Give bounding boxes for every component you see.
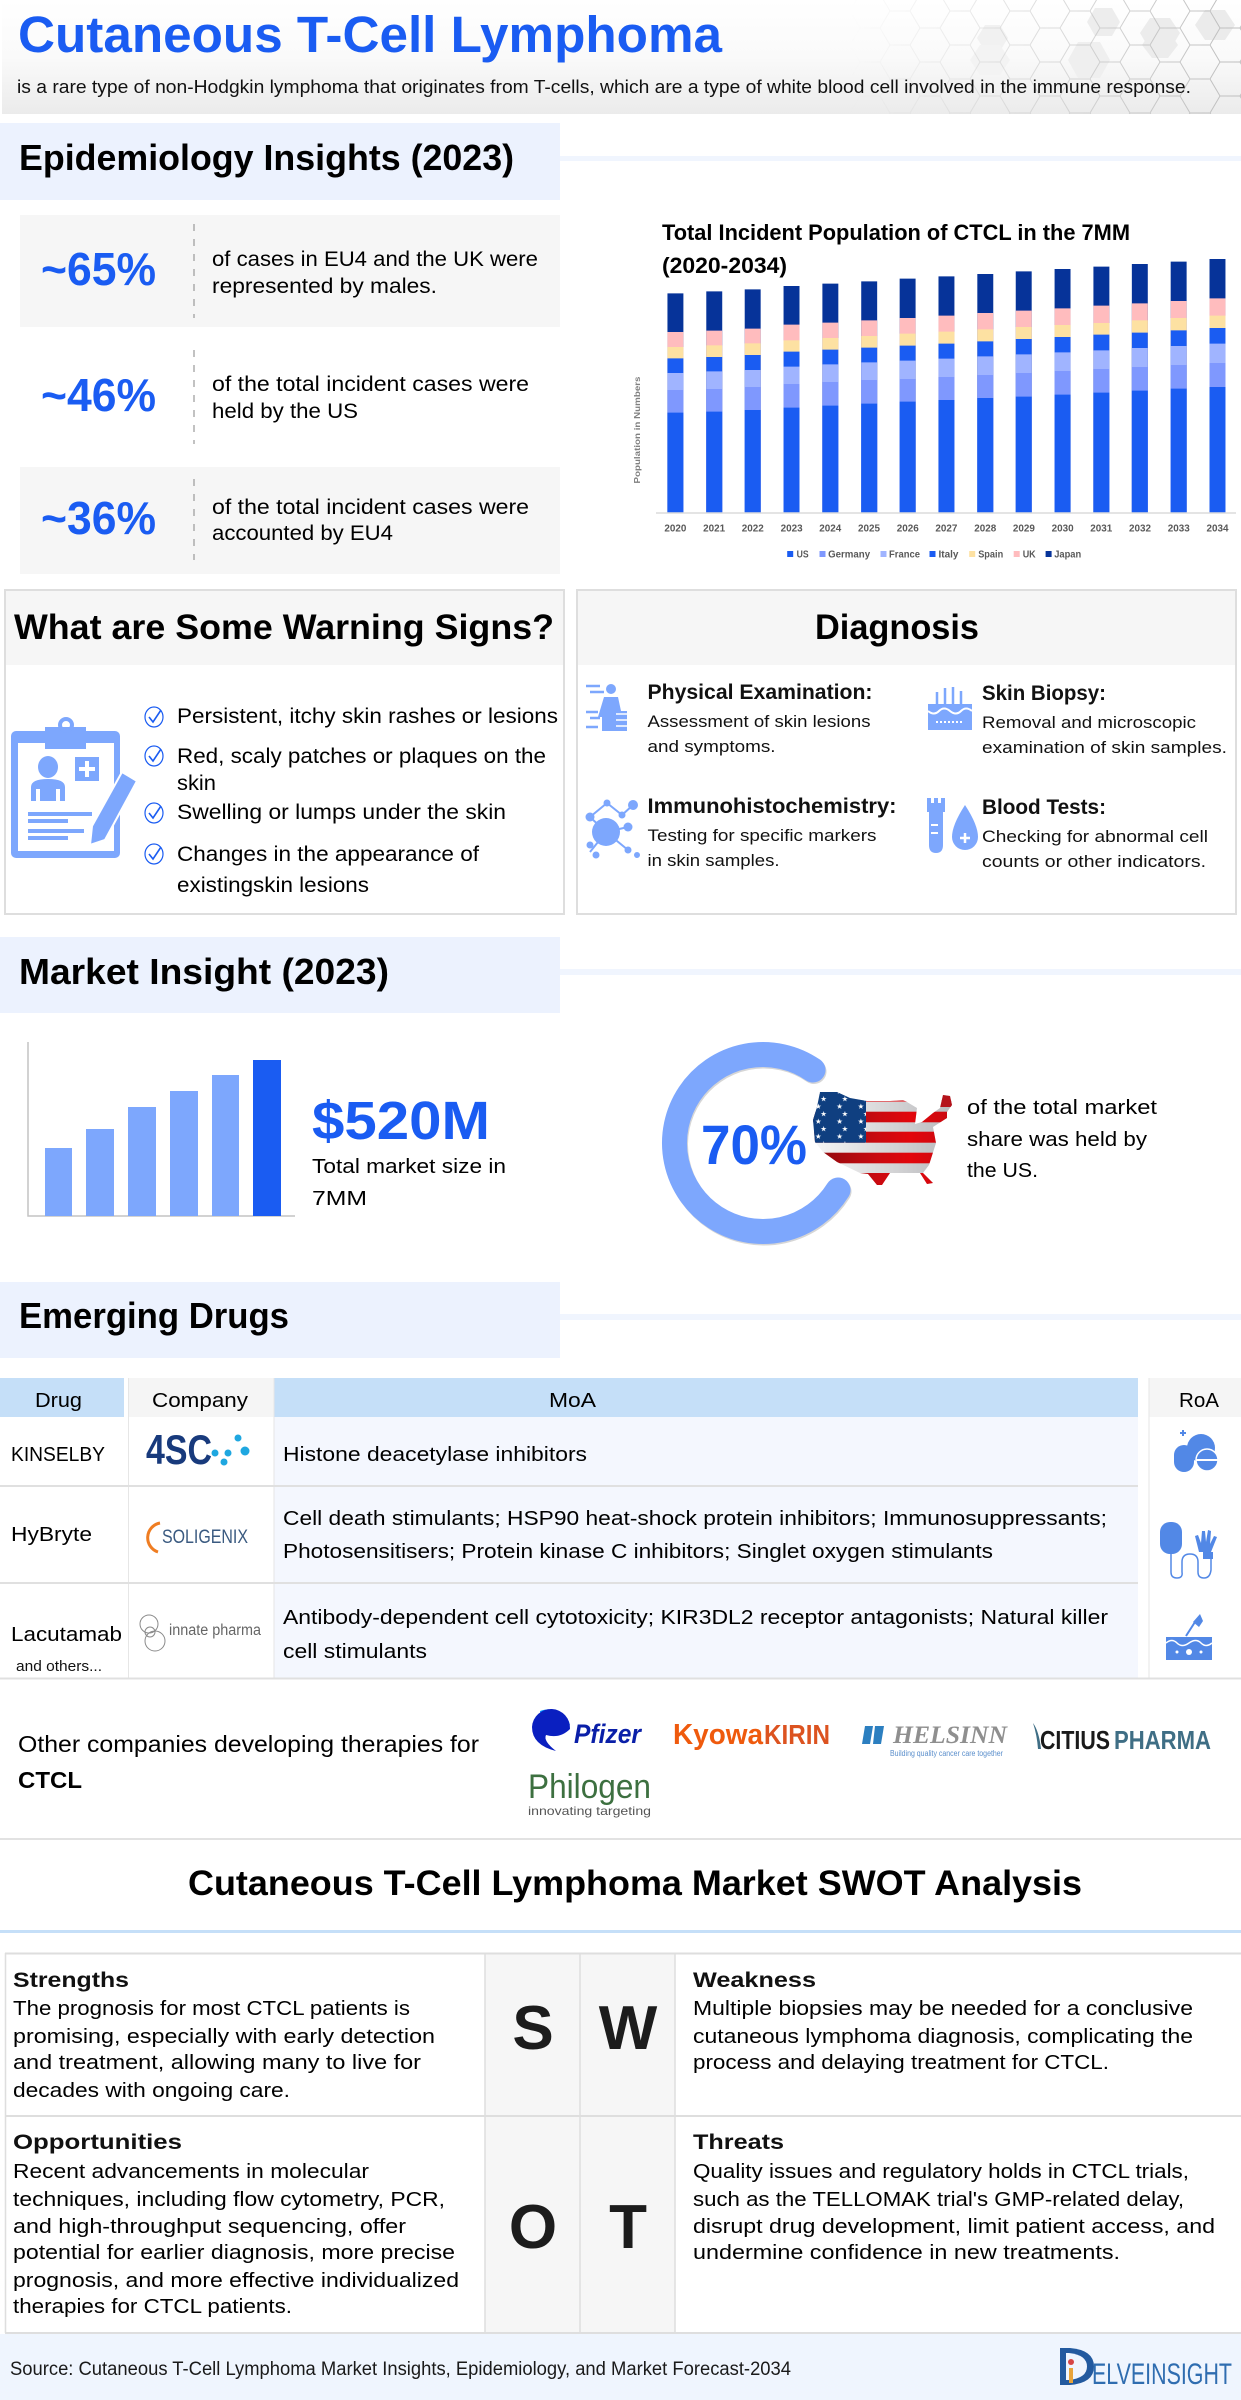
y axis label: Population in Numbers (633, 376, 642, 484)
item: immunohistochemistry: Testing for specific markers (648, 826, 876, 845)
logo: Pfizer (532, 1709, 642, 1751)
threats: such as the TELLOMAK trial's GMP-related delay, (693, 2189, 1184, 2211)
table header: Company (152, 1390, 248, 1412)
item: rashes: Persistent, itchy skin rashes or lesions (177, 705, 558, 728)
threats: Quality issues and regulatory holds in CTCL trials, (693, 2161, 1189, 2183)
legend: Japan (1054, 550, 1081, 560)
logo: Soligenix: SOLIGENIX (162, 1527, 248, 1548)
item: skin biopsy: Skin Biopsy: (982, 682, 1106, 705)
icon: test tube and drop (927, 798, 978, 853)
item: physical examination: and symptoms. (648, 737, 776, 756)
threats: Threats (693, 2131, 784, 2154)
stat: 46 percent: of the total incident cases were (212, 373, 529, 396)
x axis and years: 2026 (897, 522, 919, 534)
x axis and years: 2025 (858, 522, 880, 534)
row: Lacutamab: Antibody-dependent cell cytotoxicity; KIR3DL2 receptor antagonists; Natural killer (283, 1607, 1108, 1629)
checklist (145, 705, 558, 897)
legend: Spain (978, 550, 1003, 560)
market share text (967, 1097, 1158, 1182)
logo: 4SC: 4SC (146, 1426, 212, 1473)
item: skin biopsy (928, 682, 1227, 757)
x axis and years: 2024 (819, 522, 841, 534)
subtitle: is a rare type of non-Hodgkin lymphoma that originates from T-cells, which are a type of white blood cell involved in the immune response. (17, 76, 1191, 97)
strengths: decades with ongoing care. (13, 2080, 290, 2102)
x axis and years: 2029 (1013, 522, 1035, 534)
item: scaly patches: skin (177, 772, 216, 795)
other companies: CTCL (18, 1767, 82, 1793)
section heading: Emerging Drugs: Emerging Drugs (19, 1295, 289, 1336)
legend: Italy (938, 550, 959, 560)
icon: skin layers (928, 687, 972, 730)
icon: pills (1174, 1430, 1218, 1472)
weakness: process and delaying treatment for CTCL. (693, 2052, 1109, 2074)
item: changes: Changes in the appearance of (177, 843, 479, 866)
row: KINSELBY (11, 1426, 1218, 1473)
letter O: O (509, 2193, 557, 2262)
x axis and years: 2030 (1052, 522, 1074, 534)
logo: Philogen: innovating targeting (528, 1804, 651, 1818)
x axis and years: 2031 (1090, 522, 1112, 534)
opportunities: techniques, including flow cytometry, PCR, (13, 2189, 445, 2211)
letter W: W (599, 1994, 658, 2063)
x axis and years: 2027 (935, 522, 958, 534)
stat: 65 percent: represented by males. (212, 275, 437, 298)
chart title: Total Incident Population of CTCL in the 7MM (662, 220, 1130, 245)
threats (693, 2131, 1215, 2264)
opportunities (13, 2131, 459, 2318)
legend: US (797, 550, 809, 560)
other companies: Other companies developing therapies for (18, 1731, 479, 1757)
row: Lacutamab: Lacutamab (11, 1624, 122, 1646)
other companies (18, 1709, 1211, 1818)
logo: Kyowa Kirin: Kyowa (673, 1719, 764, 1751)
row: HyBryte: Photosensitisers; Protein kinase C inhibitors; Singlet oxygen stimulants (283, 1541, 993, 1563)
item: skin biopsy: examination of skin samples. (982, 738, 1227, 757)
stat: 36 percent: ~36% (41, 492, 156, 544)
section heading: Epidemiology Insights (0, 123, 1241, 200)
market share text: share was held by (967, 1129, 1147, 1151)
x axis and years: 2034 (1206, 522, 1229, 534)
strengths (13, 1969, 435, 2102)
logo: Citius Pharma: PHARMA (1114, 1725, 1211, 1755)
row: KINSELBY: Histone deacetylase inhibitors (283, 1444, 587, 1466)
x axis and years: 2028 (974, 522, 996, 534)
weakness: cutaneous lymphoma diagnosis, complicating the (693, 2026, 1193, 2048)
table header: RoA (1179, 1390, 1220, 1412)
strengths: Strengths (13, 1969, 129, 1992)
strengths: The prognosis for most CTCL patients is (13, 1998, 410, 2020)
row: HyBryte: Cell death stimulants; HSP90 heat-shock protein inhibitors; Immunosuppressants; (283, 1508, 1107, 1530)
table header: Drug (35, 1390, 82, 1412)
opportunities: Recent advancements in molecular (13, 2161, 369, 2183)
item: physical examination (586, 681, 872, 756)
chart title (662, 220, 1130, 278)
weakness (693, 1969, 1193, 2074)
header banner (2, 0, 1241, 114)
item: scaly patches: Red, scaly patches or plaques on the (177, 745, 546, 768)
item: immunohistochemistry: in skin samples. (648, 851, 780, 870)
item: skin biopsy: Removal and microscopic (982, 713, 1197, 732)
row: HyBryte: HyBryte (11, 1524, 92, 1546)
bar chart: market size (28, 1042, 295, 1216)
row: Lacutamab (11, 1607, 1212, 1675)
table header: MoA (549, 1390, 597, 1412)
item: physical examination: Assessment of skin lesions (648, 712, 870, 731)
item: changes (145, 843, 479, 897)
source: Source: Cutaneous T-Cell Lymphoma Market Insights, Epidemiology, and Market Forecast-2034 (10, 2359, 791, 2380)
row: Lacutamab: cell stimulants (283, 1641, 427, 1663)
item: immunohistochemistry: Immunohistochemistry: (648, 795, 896, 818)
item: blood tests: Blood Tests: (982, 796, 1106, 819)
row: KINSELBY: KINSELBY (11, 1444, 105, 1466)
icon: doctor (586, 684, 628, 731)
x axis and years: 2020 (664, 522, 687, 534)
table: emerging drugs (0, 1378, 1241, 1678)
section heading: Epidemiology Insights: Epidemiology Insights (2023) (19, 137, 514, 178)
market size value: $520M (312, 1091, 490, 1151)
panel: diagnosis (577, 590, 1236, 914)
stat: 46 percent: held by the US (212, 400, 358, 423)
item: blood tests (927, 796, 1208, 871)
item: immunohistochemistry (586, 795, 896, 870)
stat: 65 percent: ~65% (41, 243, 156, 295)
stat: 46 percent: ~46% (41, 369, 156, 421)
title: Cutaneous T-Cell Lymphoma (18, 6, 723, 63)
logo: Soligenix (148, 1523, 248, 1552)
opportunities: potential for earlier diagnosis, more precise (13, 2242, 455, 2264)
logo: Pfizer: Pfizer (574, 1719, 642, 1749)
heading: What are Some Warning Signs? (14, 608, 554, 647)
market size value (312, 1091, 506, 1210)
logo: Kyowa Kirin: KIRIN (764, 1719, 830, 1750)
stacked bars (667, 259, 1225, 513)
logo: Helsinn: HELSINN (892, 1722, 1008, 1749)
x axis and years: 2033 (1168, 522, 1190, 534)
stat: 36 percent (20, 467, 560, 574)
panel: SWOT grid (5, 1953, 1241, 2333)
threats: undermine confidence in new treatments. (693, 2242, 1120, 2264)
market share text: the US. (967, 1160, 1038, 1182)
ring chart: 70 percent US share (674, 1055, 839, 1233)
strengths: and treatment, allowing many to live for (13, 2052, 421, 2074)
section heading: Emerging Drugs (0, 1282, 1241, 1358)
logo: Citius Pharma: CITIUS (1040, 1725, 1110, 1755)
logo: Citius Pharma (1033, 1723, 1211, 1755)
opportunities: Opportunities (13, 2131, 182, 2154)
stat: 36 percent: of the total incident cases were (212, 496, 529, 519)
x axis and years (656, 513, 1236, 534)
logo: DelveInsight (1060, 2348, 1232, 2391)
logo: innate pharma: innate pharma (169, 1622, 261, 1639)
panel: warning signs (5, 590, 564, 914)
logo: Kyowa Kirin (673, 1719, 830, 1751)
x axis and years: 2023 (781, 522, 803, 534)
x axis and years: 2021 (703, 522, 725, 534)
opportunities: therapies for CTCL patients. (13, 2296, 292, 2318)
opportunities: and high-throughput sequencing, offer (13, 2216, 406, 2238)
section heading: Market Insight: Market Insight (2023) (19, 951, 389, 992)
item: blood tests: Checking for abnormal cell (982, 827, 1208, 846)
SWOT title: Cutaneous T-Cell Lymphoma Market SWOT Analysis (188, 1864, 1082, 1903)
section heading: Market Insight (0, 937, 1241, 1013)
ring chart: 70 percent US share: 70% (701, 1113, 807, 1176)
x axis and years: 2022 (742, 522, 764, 534)
logo: Helsinn: Building quality cancer care together (890, 1749, 1003, 1758)
weakness: Weakness (693, 1969, 816, 1992)
chart title: (2020-2034) (662, 253, 787, 278)
table header (35, 1390, 1220, 1412)
row: Lacutamab: and others... (16, 1658, 102, 1675)
chart: total incident population stacked bars (633, 220, 1236, 560)
item: blood tests: counts or other indicators. (982, 852, 1206, 871)
logo: Philogen: Philogen (528, 1768, 651, 1806)
legend: Germany (828, 550, 871, 560)
x axis and years: 2032 (1129, 522, 1151, 534)
panel: epidemiology stats (20, 215, 560, 574)
stat: 65 percent (20, 215, 560, 327)
logo: innate pharma (140, 1615, 261, 1651)
logo: Helsinn (862, 1722, 1008, 1758)
icon: US flag map (812, 1091, 953, 1186)
legend (787, 550, 1081, 560)
item: changes: existingskin lesions (177, 874, 369, 897)
icon: molecules (586, 800, 640, 858)
icon: IV bag and glove (1160, 1522, 1217, 1578)
stat: 46 percent (41, 350, 529, 444)
item: scaly patches (145, 745, 546, 795)
strengths: promising, especially with early detection (13, 2026, 435, 2048)
item: physical examination: Physical Examination: (648, 681, 872, 704)
market size value: 7MM (312, 1188, 367, 1210)
legend: France (889, 550, 920, 560)
row: HyBryte (11, 1508, 1217, 1578)
icon: clipboard with patient (11, 719, 137, 858)
letter S: S (512, 1994, 554, 2063)
item: swelling: Swelling or lumps under the skin (177, 801, 506, 824)
icon: skin with injection (1166, 1614, 1212, 1660)
market share text: of the total market (967, 1097, 1158, 1119)
threats: disrupt drug development, limit patient access, and (693, 2216, 1215, 2238)
stat: 36 percent: accounted by EU4 (212, 522, 393, 545)
opportunities: prognosis, and more effective individualized (13, 2270, 459, 2292)
stat: 65 percent: of cases in EU4 and the UK were (212, 248, 538, 271)
weakness: Multiple biopsies may be needed for a conclusive (693, 1998, 1193, 2020)
legend: UK (1023, 550, 1036, 560)
heading: Diagnosis (815, 608, 979, 647)
letter T: T (609, 2193, 647, 2262)
market size value: Total market size in (312, 1156, 506, 1178)
footer (0, 2334, 1241, 2400)
